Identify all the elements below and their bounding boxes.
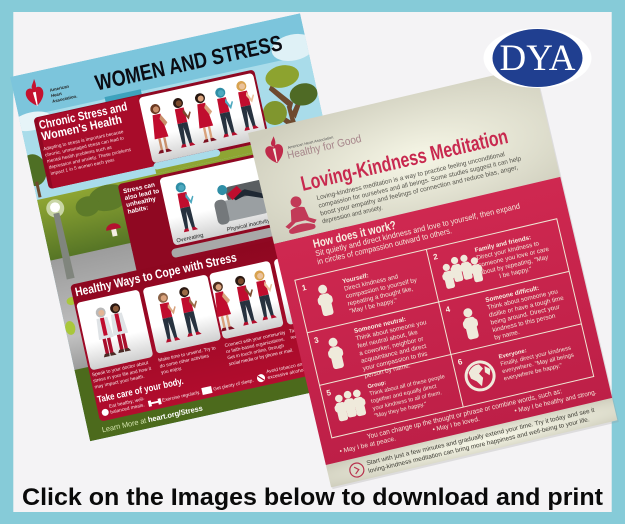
text: community advice: Get in touch online, through [227, 343, 285, 361]
cell 5: group: 5 [326, 388, 332, 398]
text: start with a few minutes: loving-kindness meditation can bring more happiness and well-being to your life. [368, 416, 591, 475]
text: eat healthy: Eat healthy, well- [109, 396, 146, 410]
text: eat healthy: balanced meals. [110, 402, 145, 416]
text: start with a few minutes: Start with just a few minutes and gradually extend your time. Try it today and see it [366, 407, 595, 467]
text: introduction: compassion for ourselves and all beings. Some studies suggest it can help [318, 155, 522, 210]
cell 4: someone difficult [445, 279, 570, 351]
text: change up the phrase: You can change up the thought or phrase or combine words, such as: [366, 388, 563, 441]
table: six circles of compassion [295, 219, 594, 438]
icon: apple [102, 408, 109, 416]
text: how it works: Sit quietly and direct kindness and love to yourself, then expand [314, 201, 521, 258]
text: how it works: in circles of compassion outward to others. [316, 226, 453, 266]
logo: american heart association: Association. [52, 93, 78, 104]
icon: circled arrow [348, 462, 365, 478]
card: unwind [143, 274, 221, 354]
panel: unhealthy habits [118, 154, 347, 270]
heading: healthy ways: Healthy Ways to Cope with Stress [74, 250, 238, 299]
cell 2: family and friends: Direct your kindness to [476, 240, 540, 262]
cell 3: someone neutral: a coworker, neighbor or [359, 336, 424, 357]
icon: globe [461, 357, 499, 395]
icon: leaf [65, 321, 76, 335]
text: may I be loved: • May I be loved. [432, 416, 481, 434]
card: hidden fourth [274, 258, 293, 324]
icon: dumbbell [148, 398, 162, 407]
cell 1: yourself: Direct kindness and [343, 273, 399, 293]
text: chronic stress body: impact 1 in 5 women each year. [50, 157, 116, 176]
cell 6: everyone: Finally, direct your kindness [500, 346, 572, 368]
text: learn more: Learn More at heart.org/Stress [101, 403, 204, 434]
text: may I be healthy: • May I be healthy and strong. [514, 389, 597, 415]
icon: bed [201, 386, 213, 395]
text: fourth advice: Talk with [289, 325, 308, 335]
icon: no smoking [257, 374, 265, 382]
cell 1: yourself: repeating a thought like, [347, 286, 414, 308]
text: introduction: Loving-kindness meditation is a way to practice feeling unconditional [316, 151, 506, 202]
cell 5: group: "May they be happy." [374, 401, 427, 420]
title: loving-kindness meditation: Loving-Kindness Meditation [299, 125, 510, 196]
text: doctor advice: Speak to your doctor about [91, 360, 150, 378]
icon: mushroom [106, 223, 121, 237]
text: introduction: depression and anxiety. [321, 204, 384, 225]
cell 4: someone difficult: 4 [445, 305, 452, 314]
text: chronic stress body: Adapting to stress is important because [43, 129, 124, 151]
logo: american heart association: Heart [50, 91, 63, 98]
icon: sofa with person [214, 180, 267, 225]
text: unwind advice: Make time to unwind. Try to [158, 345, 217, 364]
cell 3: someone neutral [313, 310, 437, 389]
icon: bushy tree left [27, 154, 46, 198]
text: unwind advice: you enjoy. [160, 366, 183, 376]
cell 2: family and friends: about by repeating, "May [479, 254, 550, 277]
cell 5: group: Think about all of these people [369, 374, 446, 398]
cell 5: group: Group: [367, 380, 387, 390]
teal tab [105, 89, 142, 103]
cell 4: someone difficult: dislike or have a tough time [488, 295, 565, 319]
text: sleep: Get plenty of sleep. [213, 378, 254, 393]
cell 5: group [326, 362, 451, 429]
logo: american heart association [26, 79, 78, 106]
text: chronic stress body: mental health problems such as [46, 145, 113, 164]
text: unwind advice: do some other activities [159, 353, 210, 370]
cell 4: someone difficult: kindness to this person [492, 312, 557, 334]
logo: healthy for good [262, 117, 363, 167]
card: community [208, 261, 284, 340]
text: doctor advice: stress in your life and how it [93, 366, 152, 384]
text: stress can also lead: Stress can [123, 181, 156, 195]
panel: chronic stress [33, 69, 271, 193]
text: community advice: Connect with your community [224, 330, 287, 349]
heading: chronic stress: Women's Health [40, 112, 123, 143]
card: doctor [76, 289, 153, 370]
cell 6: everyone: everywhere. "May all beings [502, 353, 575, 375]
text: community advice: social media or by phone or mail. [228, 348, 294, 368]
cell 2: family and friends: someone you love or care [478, 246, 550, 269]
card: overeating and inactivity: Overeating [176, 233, 204, 244]
text: chronic stress body: depression and anxiety. These problems [48, 147, 132, 170]
text: community advice: or faith-based organizations. [226, 336, 285, 355]
cell 3: someone neutral: Someone neutral: [353, 316, 407, 335]
logo: DYA oval [484, 28, 592, 88]
cell 2: family and friends: Family and friends: [474, 234, 532, 254]
text: fourth advice: receive [290, 332, 307, 341]
icon: leaf [66, 297, 74, 306]
cell 3: someone neutral: acquaintance and direct [360, 343, 427, 365]
caption: click to download: Click on the Images below to download and print [22, 484, 603, 511]
card: overeating and inactivity: Physical inactivity [226, 218, 271, 233]
cell 3: someone neutral: feel neutral about, like [357, 329, 419, 350]
cell 1: yourself: compassion to yourself by [345, 277, 419, 300]
heading: chronic stress: Chronic Stress and [38, 99, 128, 132]
cell 2: family and friends: I be happy." [499, 266, 532, 280]
text: exercise: Exercise regularly. [161, 390, 201, 404]
text: avoid tobacco: excessive alcohol. [267, 367, 306, 381]
cell 1: yourself: Yourself: [342, 272, 369, 285]
cell 2: family and friends: 2 [432, 252, 439, 262]
cell 5: group: together and equally direct [370, 384, 438, 405]
icon: tree right [263, 65, 318, 125]
cell 6: everyone [457, 332, 577, 395]
cell 3: someone neutral: your compassion to this [362, 350, 428, 372]
card: overeating and inactivity [160, 158, 270, 245]
text: may I be at peace: • May I be at peace. [339, 435, 397, 455]
pill: gray [172, 228, 272, 258]
text: stress can also lead: unhealthy [126, 196, 157, 209]
card: five women [138, 73, 267, 163]
text: stress can also lead: also lead to [124, 188, 160, 202]
text: stress can also lead: habits: [127, 204, 149, 216]
cell 3: someone neutral: Think about someone you [355, 319, 428, 342]
cell 1: yourself [301, 258, 422, 325]
logo: american heart association: American [49, 84, 70, 93]
text: introduction: boost your empathy and feelings of connection and reduce bias, anger, [320, 164, 519, 218]
cell 4: someone difficult: Think about someone you [487, 288, 559, 312]
cell 5: group: your kindness to all of them. [372, 390, 443, 412]
logo: healthy for good: American Heart Association. [287, 135, 335, 150]
heading: how does it work: How does it work? [311, 218, 397, 251]
cell 6: everyone: everywhere be happy." [503, 363, 563, 382]
cell 1: yourself: "May I be happy." [349, 297, 398, 315]
poster: women and stress [10, 13, 347, 442]
heading: take care of your body: Take care of your body. [96, 376, 185, 406]
cell 4: someone difficult: being around. Direct your [490, 304, 560, 327]
cell 6: everyone: Everyone: [498, 348, 527, 361]
cell 1: yourself: 1 [301, 283, 308, 293]
cell 6: everyone: 6 [457, 357, 464, 367]
cell 4: someone difficult: by name. [494, 329, 521, 342]
title: women and stress: WOMEN AND STRESS [93, 30, 285, 96]
logo: DYA oval: DYA [500, 38, 576, 79]
text: avoid tobacco: Avoid tobacco and [266, 361, 306, 375]
panel: healthy ways to cope [70, 247, 306, 421]
cell 3: someone neutral: 3 [313, 335, 320, 345]
cell 3: someone neutral: person by name. [364, 362, 411, 380]
icon: meditating person [279, 193, 319, 235]
text: chronic stress body: chronic, unmanaged stress can lead to [45, 135, 125, 158]
cell 2: family and friends [432, 227, 554, 294]
text: doctor advice: may impact your health. [94, 374, 145, 391]
pill cutout [153, 149, 221, 170]
icon: street lamp [46, 199, 74, 280]
logo: healthy for good: Healthy for Good [286, 133, 363, 162]
cell 4: someone difficult: Someone difficult: [485, 285, 540, 304]
poster: loving-kindness meditation [248, 66, 619, 489]
